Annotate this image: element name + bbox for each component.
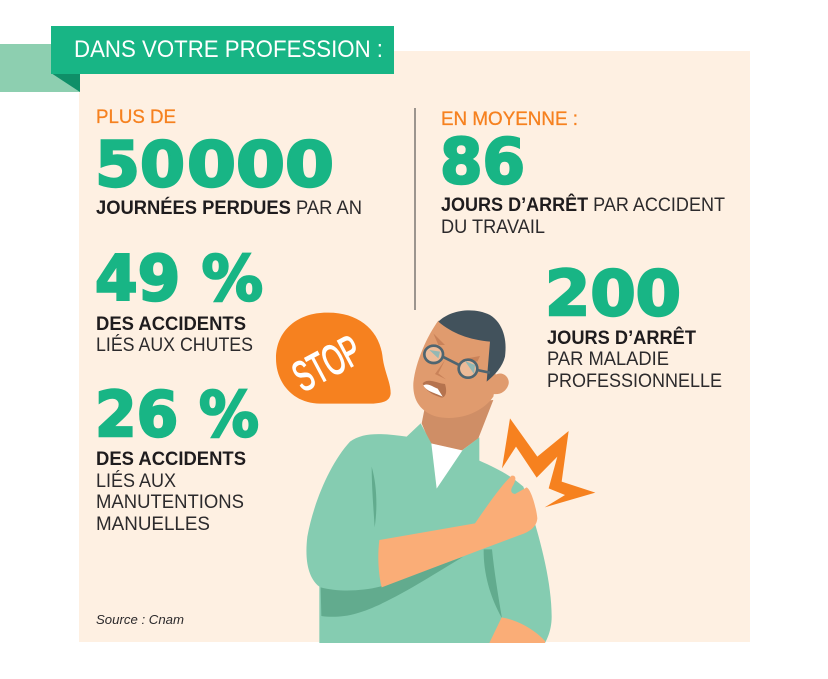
stat: 86 jours d'arrêt: JOURS D’ARRÊT PAR ACCIDENT — [441, 194, 725, 216]
vertical divider — [414, 108, 416, 310]
stat: 200 jours d'arrêt: PAR MALADIE — [547, 349, 669, 370]
neck — [422, 400, 493, 451]
eyebrows and nose — [433, 333, 480, 379]
stat: 200 jours d'arrêt: 200 — [545, 257, 681, 330]
face — [413, 321, 497, 418]
glasses — [424, 346, 490, 378]
stat: 49 % chutes: DES ACCIDENTS — [96, 314, 246, 335]
background panel — [79, 51, 750, 642]
stat: 50 000 journées perdues: JOURNÉES PERDUES PAR AN — [96, 197, 362, 219]
stat: 200 jours d'arrêt: PROFESSIONNELLE — [547, 371, 722, 392]
illustration: injured man — [276, 310, 595, 643]
stat: 49 % chutes — [95, 242, 263, 356]
stat: 49 % chutes: LIÉS AUX CHUTES — [96, 335, 253, 356]
stat: 86 jours d'arrêt — [440, 108, 725, 238]
arm and hand — [378, 476, 537, 587]
shirt fold right — [484, 549, 502, 618]
stat: 50 000 journées perdues: 000 — [187, 128, 334, 201]
second hand — [489, 617, 545, 643]
shirt shadow lower — [321, 557, 463, 617]
stat: 49 % chutes: 49 % — [95, 242, 263, 315]
undershirt — [431, 443, 463, 489]
stat: 26 % manutentions: 26 % — [95, 378, 259, 451]
stat: 200 jours d'arrêt — [545, 257, 722, 392]
speech bubble: stop: STOP — [285, 326, 369, 401]
stat: 26 % manutentions — [95, 378, 259, 535]
hair — [438, 310, 506, 382]
stat: 50 000 journées perdues: 50 — [95, 128, 185, 201]
pain burst — [502, 418, 595, 507]
stat: 200 jours d'arrêt: JOURS D’ARRÊT — [547, 327, 696, 349]
source: Source : Cnam — [96, 613, 184, 627]
stat: 50 000 journées perdues — [95, 106, 362, 219]
stat: 50 000 journées perdues: PLUS DE — [96, 106, 176, 128]
stat: 26 % manutentions: LIÉS AUX — [96, 471, 176, 492]
stat: 86 jours d'arrêt: DU TRAVAIL — [441, 217, 545, 238]
header ribbon — [0, 26, 394, 92]
stat: 26 % manutentions: MANUTENTIONS — [96, 492, 244, 513]
shirt body — [306, 423, 552, 643]
mouth — [423, 381, 446, 398]
ear — [493, 373, 509, 394]
stat: 26 % manutentions: MANUELLES — [96, 514, 210, 535]
stat: 86 jours d'arrêt: EN MOYENNE : — [441, 108, 578, 130]
stat: 86 jours d'arrêt: 86 — [440, 125, 525, 198]
shirt fold left — [372, 467, 376, 527]
header title: DANS VOTRE PROFESSION : — [74, 36, 383, 63]
stat: 26 % manutentions: DES ACCIDENTS — [96, 449, 246, 470]
